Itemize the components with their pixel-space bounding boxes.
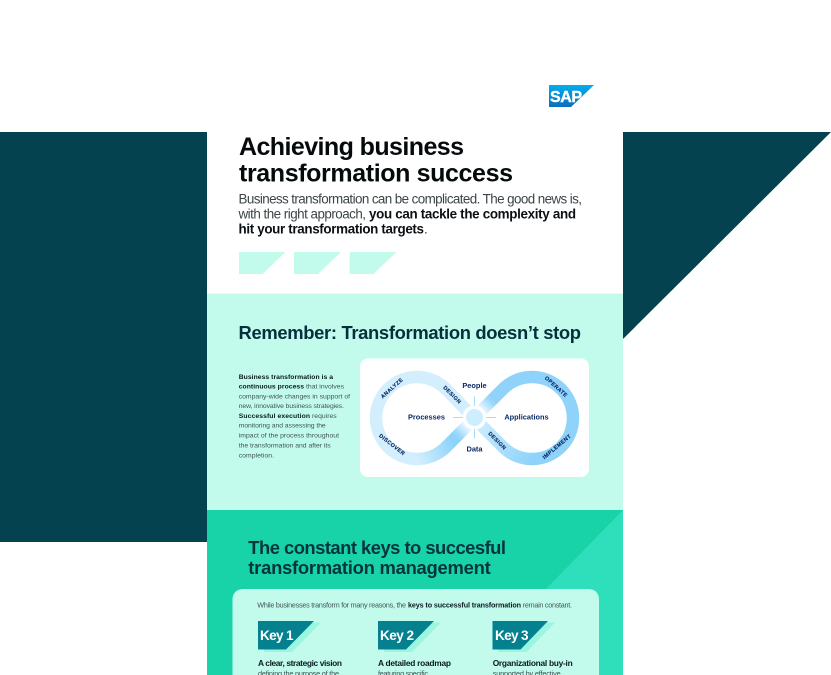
- heading: transformation management: [248, 557, 491, 578]
- key 3: Organizational buy-in: [493, 658, 573, 668]
- key 3: Key 3: [495, 628, 529, 643]
- keys intro text: keys to successful transformation: [408, 601, 521, 610]
- text block: completion.: [239, 453, 274, 460]
- decorative chevrons: [239, 252, 396, 274]
- heading: [248, 537, 506, 578]
- key 2: [378, 621, 451, 675]
- keys intro text: remain constant.: [523, 601, 572, 610]
- text block: Successful execution: [239, 413, 310, 420]
- infinity right loop: [474, 377, 573, 459]
- infinity diagram card: [360, 358, 589, 477]
- text block: [239, 374, 350, 460]
- title: transformation success: [239, 160, 513, 188]
- text block: company-wide changes in support of: [239, 393, 350, 400]
- intro text: .: [424, 222, 428, 236]
- loop stage labels: DISCOVER: [377, 433, 406, 457]
- key 3: [492, 621, 573, 675]
- dark triangle: [623, 132, 831, 339]
- key 1: Key 1: [260, 628, 294, 643]
- text block: monitoring and assessing the: [239, 423, 326, 430]
- key 1: A clear, strategic vision: [258, 658, 342, 668]
- loop stage labels: ANALYZE: [380, 377, 405, 400]
- keys card: [232, 589, 599, 675]
- dark background block: [0, 132, 207, 542]
- heading: The constant keys to succesful: [248, 537, 506, 558]
- hub circle and rays: [453, 396, 496, 438]
- text block: that involves: [306, 384, 345, 391]
- title: [239, 133, 513, 188]
- loop stage labels: IMPLEMENT: [542, 433, 573, 461]
- heading: Remember: Transformation doesn’t stop: [238, 322, 581, 343]
- loop stage labels: OPERATE: [543, 376, 568, 399]
- key 1: [258, 621, 342, 675]
- loop stage labels: DESIGN: [441, 385, 462, 406]
- keys intro text: While businesses transform for many reasons, the: [257, 601, 406, 610]
- diagram labels: Processes: [408, 412, 445, 422]
- diagram labels: Data: [466, 444, 483, 454]
- key 2: A detailed roadmap: [378, 658, 451, 668]
- intro text: [238, 192, 582, 236]
- diagram labels: People: [462, 381, 487, 390]
- panel: intro: [207, 132, 623, 294]
- SAP logo: SAP: [550, 89, 582, 106]
- text block: the transformation and after its: [239, 443, 331, 450]
- text block: impact of the process throughout: [239, 433, 339, 440]
- intro text: hit your transformation targets: [238, 222, 424, 236]
- text block: continuous process: [239, 384, 304, 391]
- text block: requires: [312, 413, 337, 420]
- keys intro text: [257, 601, 572, 610]
- infinity left loop: [376, 377, 474, 459]
- text block: Business transformation is a: [239, 374, 333, 381]
- intro text: with the right approach,: [238, 206, 366, 222]
- text block: new, innovative business strategies.: [239, 403, 344, 410]
- title: Achieving business: [239, 133, 464, 161]
- intro text: you can tackle the complexity and: [369, 206, 576, 222]
- intro text: Business transformation can be complicated. The good news is,: [238, 192, 582, 206]
- loop stage labels: [377, 376, 573, 461]
- key 2: Key 2: [380, 628, 414, 643]
- panel: transformation doesn't stop: [207, 294, 623, 510]
- diagram labels: Applications: [504, 412, 549, 422]
- SAP logo: [549, 85, 594, 107]
- diagram labels: [408, 381, 549, 454]
- loop stage labels: DESIGN: [486, 431, 507, 452]
- panel: constant keys: [207, 510, 623, 675]
